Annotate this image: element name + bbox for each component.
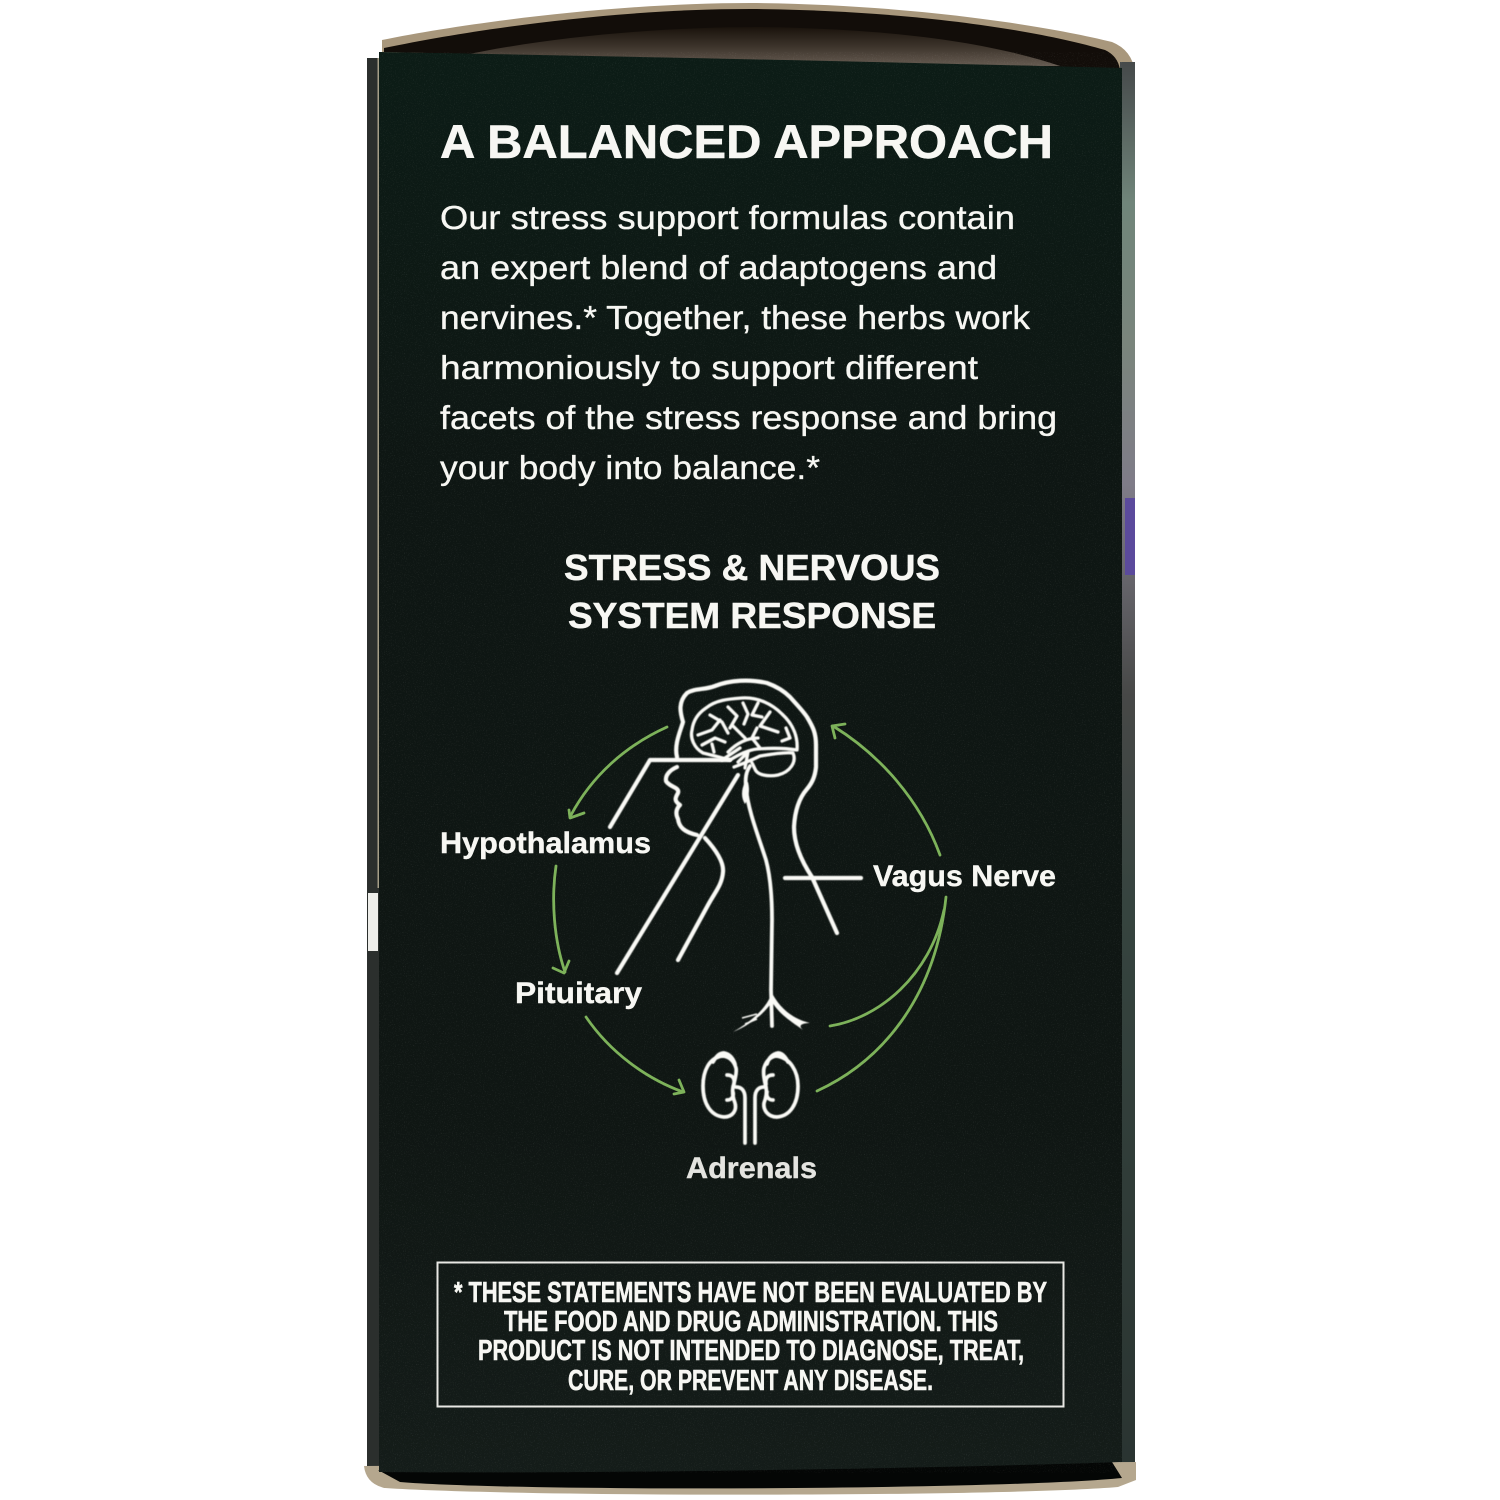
label: Hypothalamus: Hypothalamus bbox=[440, 827, 651, 860]
subheading: Stress and Nervous System Response bbox=[564, 547, 940, 636]
main dark panel bbox=[379, 52, 1122, 1472]
subheading: Stress and Nervous System Response: STRESS & NERVOUS bbox=[564, 547, 940, 588]
body paragraph: harmoniously to support different bbox=[440, 349, 978, 386]
body paragraph: nervines.* Together, these herbs work bbox=[440, 299, 1031, 336]
disclaimer box: CURE, OR PREVENT ANY DISEASE. bbox=[568, 1365, 933, 1397]
right side strip of the box bbox=[1120, 62, 1135, 1470]
diagram: stress response cycle bbox=[553, 681, 946, 1143]
left side strip of the box bbox=[367, 58, 379, 1470]
spinal cord with vagus nerve roots bbox=[733, 766, 810, 1032]
icon: kidneys bbox=[703, 1053, 798, 1143]
disclaimer box bbox=[438, 1262, 1064, 1406]
label: Adrenals: Adrenals bbox=[686, 1152, 817, 1185]
vagus leader line bbox=[785, 876, 861, 880]
bottom flap of the box bbox=[364, 1462, 1136, 1495]
label: Pituitary: Pituitary bbox=[515, 977, 642, 1010]
pituitary leader line bbox=[617, 775, 738, 973]
disclaimer box: PRODUCT IS NOT INTENDED TO DIAGNOSE, TREAT, bbox=[478, 1335, 1024, 1367]
head, neck and shoulder outline bbox=[610, 681, 861, 973]
green cycle arrows bbox=[553, 724, 946, 1094]
top flap of the box bbox=[382, 3, 1135, 72]
body paragraph: an expert blend of adaptogens and bbox=[440, 249, 997, 286]
label: Vagus Nerve: Vagus Nerve bbox=[873, 860, 1056, 893]
body paragraph: facets of the stress response and bring bbox=[440, 399, 1057, 436]
subheading: Stress and Nervous System Response: SYSTEM RESPONSE bbox=[568, 595, 936, 636]
hypothalamus leader line bbox=[610, 760, 730, 827]
body paragraph: your body into balance.* bbox=[440, 449, 820, 486]
heading: A Balanced Approach: A BALANCED APPROACH bbox=[440, 115, 1053, 168]
body paragraph: Our stress support formulas contain bbox=[440, 199, 1015, 236]
disclaimer box: * THESE STATEMENTS HAVE NOT BEEN EVALUATED BY bbox=[454, 1277, 1047, 1309]
body paragraph bbox=[440, 199, 1057, 486]
brain bbox=[691, 698, 797, 776]
disclaimer box: THE FOOD AND DRUG ADMINISTRATION. THIS bbox=[504, 1306, 998, 1338]
